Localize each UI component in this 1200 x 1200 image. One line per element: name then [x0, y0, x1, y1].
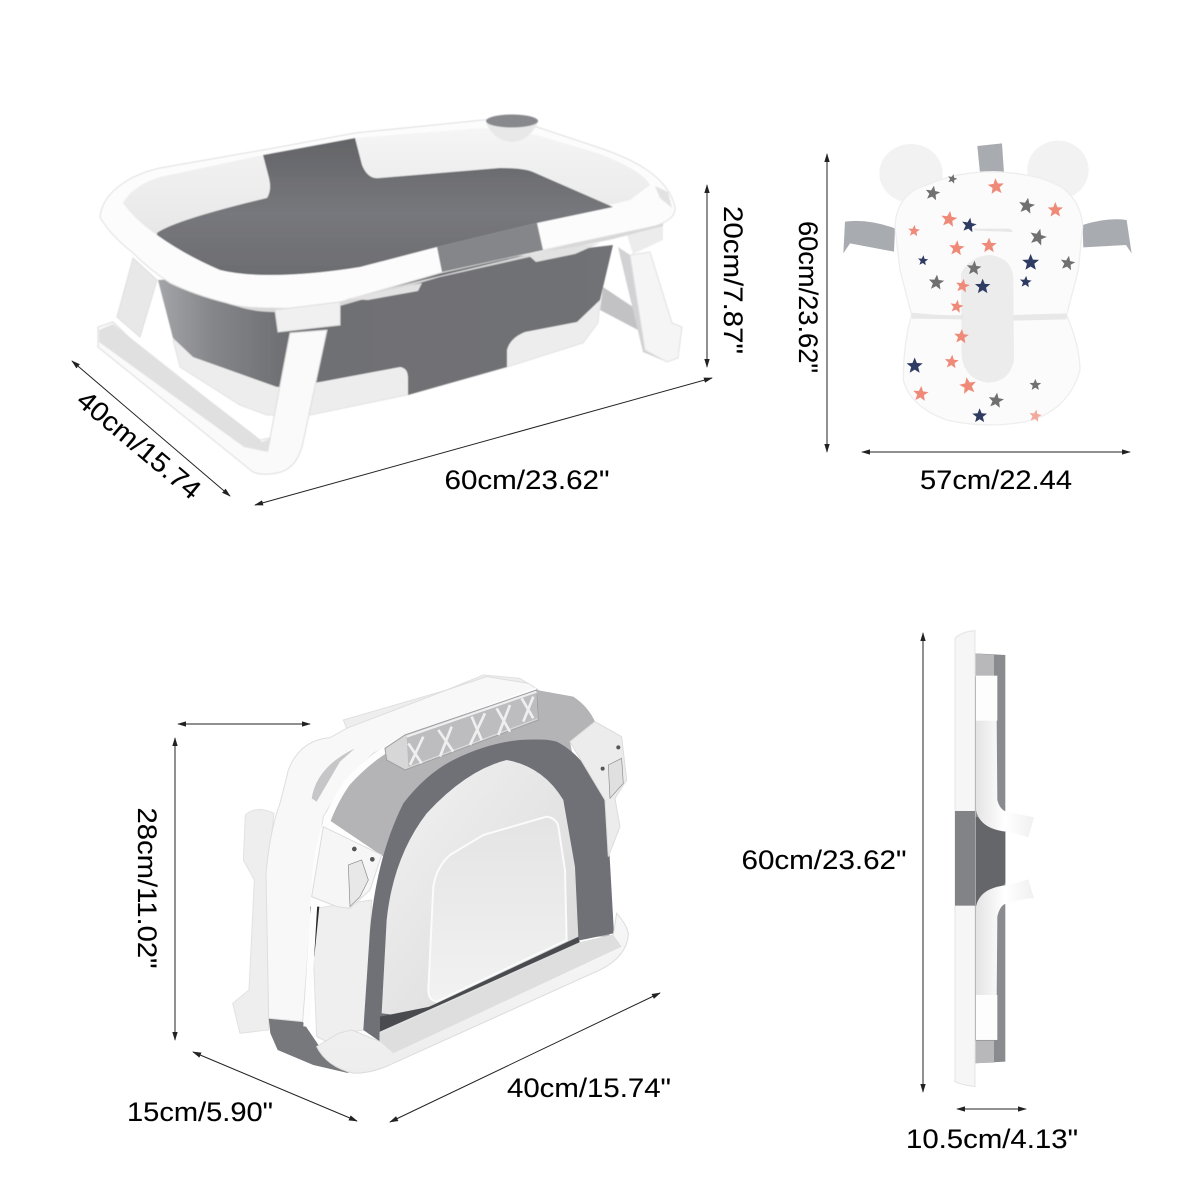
folded height arrow: [174, 738, 176, 1040]
star pattern: [907, 173, 1076, 422]
label: folded width: 40cm/15.74": [507, 1073, 671, 1103]
center seat recess: [961, 255, 1014, 383]
folded depth arrow: [193, 1052, 357, 1121]
left ear: [879, 144, 943, 203]
back truss: [600, 287, 642, 330]
label: tub length: 60cm/23.62": [444, 465, 610, 495]
dark center: [975, 817, 1005, 907]
folded top arrow: [178, 723, 310, 725]
dark gap: [310, 907, 319, 957]
front gray strip on rim: [437, 223, 543, 272]
gray inner dome: [327, 690, 610, 937]
round inset on frame: [312, 748, 355, 802]
label: tub width: 40cm/15.74: [71, 385, 207, 505]
label: folded depth: 15cm/5.90": [127, 1097, 273, 1127]
label: pad height: 60cm/23.62": [793, 221, 823, 373]
dark bottom strip: [380, 937, 580, 1032]
front panel: [428, 817, 567, 1002]
pad width arrow: [862, 451, 1130, 453]
thin white frame arc: [307, 691, 537, 1027]
tub height arrow: [706, 185, 708, 367]
lower leg: [976, 879, 1034, 1000]
front panel gray section: [955, 811, 975, 906]
side view illustration: [955, 631, 1034, 1087]
label: side length: 60cm/23.62": [742, 845, 906, 875]
side thickness arrow: [957, 1108, 1026, 1110]
dimension arrows: [72, 154, 1130, 1122]
right ear: [1027, 141, 1089, 199]
waist fold: [912, 313, 1067, 321]
rim outer shell: [100, 119, 675, 308]
rocker base and front leg: [98, 322, 327, 474]
inner light dome: [382, 760, 578, 1017]
unfolded bathtub illustration: [98, 114, 682, 474]
lower strut area: [313, 900, 372, 1047]
back right leg: [630, 252, 682, 362]
dark arch: [363, 739, 614, 1042]
folded width arrow: [390, 993, 660, 1122]
outer white frame: [266, 677, 538, 1022]
pad height arrow: [826, 154, 828, 452]
back right bracket: [627, 223, 663, 254]
tub inner wall: [123, 128, 650, 275]
base tray: [317, 913, 628, 1073]
rim side clip: [655, 186, 672, 208]
rocker top face: [99, 324, 271, 452]
collapsible gray body: [158, 245, 613, 395]
left side tab and rear leg: [233, 810, 274, 1033]
soap cup: [486, 114, 538, 142]
light end shading: [975, 653, 994, 1063]
folded bathtub illustration: [233, 675, 628, 1073]
tray inner slope: [380, 935, 622, 1053]
bottom gray body edge: [269, 1018, 349, 1073]
pad body: [895, 172, 1083, 425]
rim underside shadow: [132, 222, 663, 312]
truss handle: [385, 690, 538, 770]
headrest fold: [973, 229, 1013, 232]
label: pad width: 57cm/22.44: [920, 465, 1072, 495]
tub width arrow: [72, 361, 230, 496]
inner folding strut: [618, 247, 662, 360]
rear support leg: [117, 258, 157, 337]
front panel white: [955, 631, 975, 1087]
right bracket with latch: [570, 722, 627, 857]
label: tub height: 20cm/7.87": [718, 206, 748, 354]
side length arrow: [922, 633, 924, 1092]
left bracket with latch: [312, 827, 382, 908]
upper leg: [976, 717, 1034, 837]
gray back panel: [975, 653, 1005, 1063]
tub length arrow: [255, 378, 712, 505]
right gray strap: [1083, 219, 1132, 253]
upper block: [976, 676, 997, 721]
gray tub floor and back strip: [157, 138, 613, 275]
left gray strap: [843, 221, 895, 253]
rear handle plate: [343, 675, 538, 737]
front left bracket: [275, 302, 340, 332]
label: folded height: 28cm/11.02": [132, 808, 162, 968]
under-rim tabs: [346, 243, 600, 300]
bath support pad illustration: [843, 141, 1132, 425]
label: side thickness: 10.5cm/4.13": [906, 1124, 1078, 1154]
tub base band: [173, 300, 600, 415]
lower block: [976, 995, 997, 1040]
top gray strap: [977, 143, 1004, 173]
